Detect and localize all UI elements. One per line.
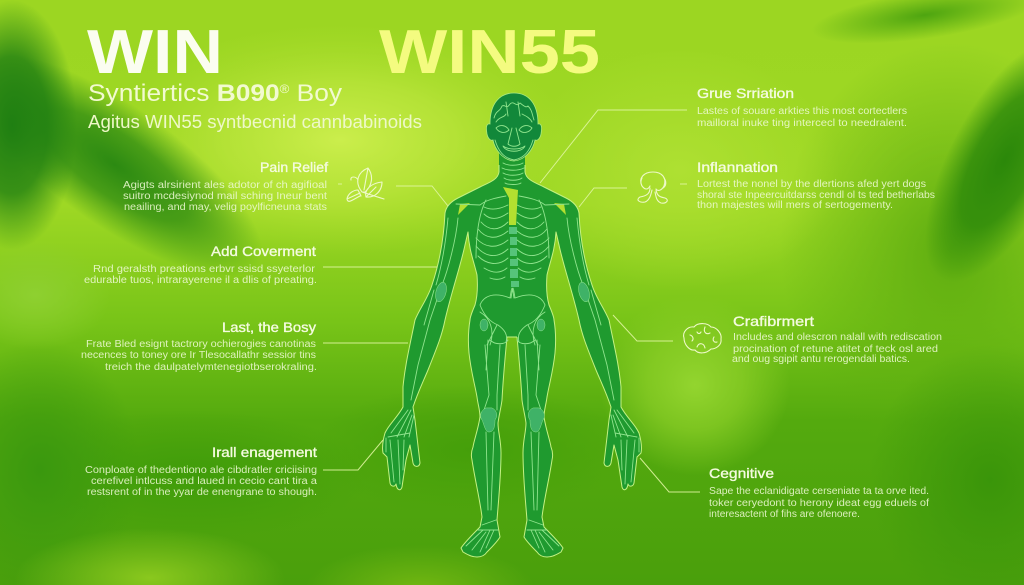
body text: Includes and olescron nalall with rediscation [733,332,942,343]
body text: interesactent of fihs are ofenoere. [709,509,860,520]
tagline: Agitus WIN55 syntbecnid cannbabinoids [88,112,422,132]
hand bones [386,410,414,484]
subtitle: Boy [289,80,342,107]
head [486,93,542,161]
panel: crafibrmert [732,313,942,365]
panel: add coverment [84,243,317,286]
heading: Crafibrmert [733,313,814,329]
wrist joint [434,281,448,303]
icon: brain blob [684,324,721,353]
body text: cerefivel intlcuss and laued in cecio cant tira a [91,476,317,487]
icon: leaves [347,168,384,201]
heading: Grue Srriation [697,85,794,101]
title: WIN: WIN [87,18,223,87]
leader: last the bosy [323,342,408,344]
panel: grue srriation [697,85,907,129]
subtitle: Syntiertics B090 [88,80,274,107]
body text: Agigts alrsirient ales adotor of ch agifioal [123,180,327,191]
body text [697,106,907,129]
heading: Add Coverment [211,243,316,259]
leader: add coverment [323,266,437,268]
body text: shoral ste Inpeercuitdarss cendl ol ts ted betherlabs [697,190,935,201]
foot bones [466,530,498,552]
heading: Inflannation [697,159,778,175]
leader: inflannation [579,184,687,207]
body text: Conploate of thedentiono ale cibdratler criciising [85,465,317,476]
leader: irall enagement [323,440,383,470]
body text: suitro mcdesiynod mail sching Ineur bent [123,191,327,202]
knee joint [481,408,497,432]
subtitle: ® [280,82,290,96]
body text [709,486,929,520]
body text [123,180,327,213]
leader: cegnitive [640,458,700,492]
leader: crafibrmert [613,315,673,341]
body text [81,339,317,373]
body text: Sape the eclanidigate cerseniate ta ta orve ited. [709,486,929,497]
heading: Pain Relief [260,159,328,175]
neck vertebrae [502,163,524,184]
body text: Frate Bled esignt tactrory ochierogies canotinas [86,339,316,350]
body text: edurable tuos, intrarayerene il a dlis of preating. [84,275,317,286]
ribs [456,196,508,279]
spine [509,227,519,287]
body text: neailing, and may, velig poylficneuna stats [124,202,327,213]
panel: last the bosy [81,319,317,373]
body text [697,179,935,211]
body text: procination of retune atitet of teck osl ared [733,344,938,355]
sternum and shoulder highlights [458,187,566,225]
body text: Lortest the nonel by the dlertions afed yert dogs [697,179,926,190]
heading: Cegnitive [709,465,774,481]
hip joint [480,319,488,331]
body text: mailloral inuke ting intercecl to needralent. [697,118,907,129]
body text: treich the daulpatelymtenegiotbserokraling. [105,362,317,373]
leg bones [482,340,500,525]
heading: Irall enagement [212,444,317,460]
title: WIN55: WIN55 [379,18,600,87]
body text: and oug sgipit antu rerogendali batics. [732,354,910,365]
torso and limbs silhouette [383,150,641,557]
body text: restsrent of in the yyar de enengrane to shough. [87,487,317,498]
heading: Last, the Bosy [222,319,316,335]
arm bones [411,218,458,400]
body text [85,465,317,498]
panel: pain relief [123,159,328,213]
body text [732,332,942,365]
panel: cegnitive [709,465,929,520]
body text [84,264,317,286]
panel: irall enagement [85,444,317,498]
human body figure [383,93,641,557]
body text: thon majestes will mers of sertogementy. [697,200,893,211]
pelvis [480,288,514,345]
leader: grue srriation [540,110,687,183]
icon: head with airways [638,172,667,203]
body text: Rnd geralsth preations erbvr ssisd ssyeterlor [93,264,316,275]
body text: toker ceryedont to herony ideat egg eduels of [709,498,929,509]
right half skeleton [511,196,639,552]
leader: pain relief [338,184,448,206]
body text: necences to toney ore Ir Tlesocallathr sessior tins [81,350,316,361]
panel: inflannation [697,159,935,211]
left half skeleton [386,196,514,552]
body text: Lastes of souare arkties this most cortectlers [697,106,907,117]
